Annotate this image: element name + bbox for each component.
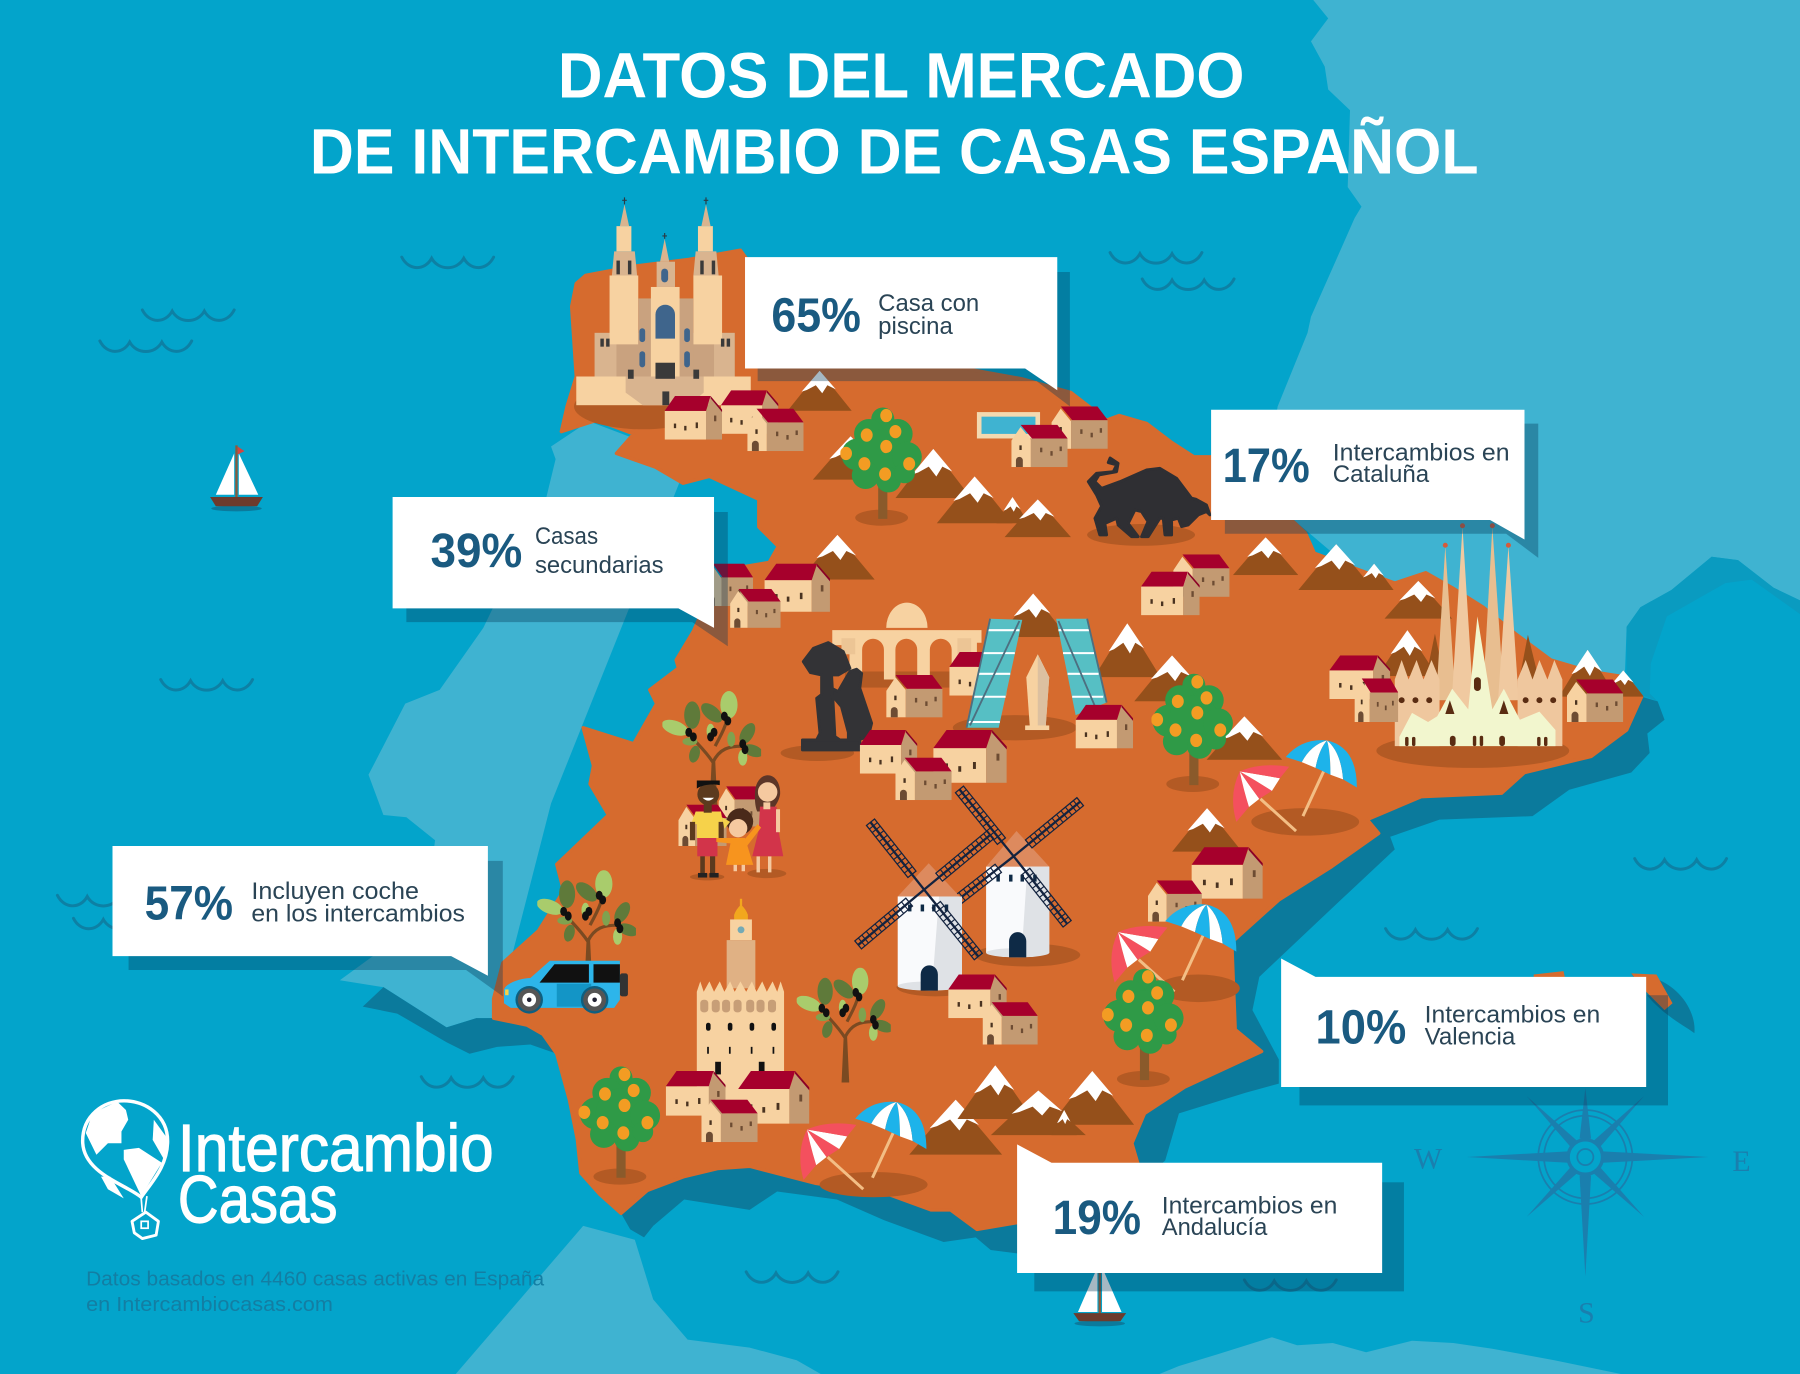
callout: 65%: Casa con bbox=[878, 290, 979, 317]
callout: 17%: 17% bbox=[1223, 439, 1310, 493]
landmark: Torre del Oro bbox=[697, 899, 784, 1113]
callout: 17%: Intercambios en bbox=[1333, 439, 1510, 466]
landmark: Oso y Madroño statue bbox=[781, 643, 872, 761]
landmark: Kio towers and obelisk bbox=[953, 619, 1107, 740]
icon: compass: E bbox=[1732, 1145, 1751, 1178]
callout: 39%: secundarias bbox=[535, 552, 664, 579]
icon: orange tree north bbox=[840, 407, 922, 526]
land: France bbox=[1263, 0, 1800, 689]
logo: Intercambio Casas: Casas bbox=[178, 1163, 337, 1237]
icon: orange tree south-west bbox=[578, 1066, 660, 1185]
callout: 19% bbox=[1017, 1144, 1404, 1291]
logo: Intercambio Casas: Intercambio bbox=[178, 1112, 494, 1186]
map: Spain bbox=[494, 250, 1642, 1229]
houses: near pool bbox=[1011, 406, 1108, 467]
callout: 39% bbox=[393, 497, 728, 646]
land: Portugal bbox=[340, 421, 689, 1027]
land: southern coast bottom bbox=[1159, 1337, 1621, 1374]
icon: sailboat west bbox=[210, 445, 263, 511]
callout: 10% bbox=[1281, 958, 1668, 1105]
footer note bbox=[86, 1268, 545, 1316]
house: behind Kio tower bbox=[949, 652, 1008, 696]
houses: Madrid bbox=[860, 675, 1134, 800]
icon: compass bbox=[1414, 1088, 1751, 1329]
footer note: en Intercambiocasas.com bbox=[86, 1293, 333, 1316]
coast shadow: Atlantic bbox=[363, 987, 557, 1054]
icon: beach umbrellas Andalucía bbox=[800, 1102, 928, 1197]
callout: 39%: Casas bbox=[535, 523, 598, 550]
logo: Intercambio Casas bbox=[83, 1101, 494, 1239]
islands: Baleares bbox=[1534, 971, 1673, 1010]
callout: 65%: 65% bbox=[771, 289, 861, 343]
icon: car bbox=[504, 961, 628, 1014]
callout: 10%: Valencia bbox=[1425, 1024, 1516, 1051]
houses: west bbox=[705, 564, 831, 628]
callout: 17%: Cataluña bbox=[1333, 461, 1430, 488]
waves bbox=[57, 253, 1727, 1290]
callout: 19%: 19% bbox=[1053, 1191, 1141, 1245]
footer note: Datos basados en 4460 casas activas en España bbox=[86, 1268, 545, 1291]
callout: 57%: Incluyen coche bbox=[251, 878, 419, 905]
title: DATOS DEL MERCADO bbox=[558, 40, 1244, 112]
callout: 57%: en los intercambios bbox=[251, 901, 465, 928]
title bbox=[310, 40, 1479, 187]
callout: 19%: Intercambios en bbox=[1162, 1192, 1337, 1219]
icon: globe balloon bbox=[83, 1101, 168, 1239]
callout: 10%: Intercambios en bbox=[1425, 1002, 1600, 1029]
icon: orange tree east bbox=[1151, 674, 1233, 792]
icon: bull bbox=[1087, 458, 1210, 546]
icon: beach umbrellas east bbox=[1233, 740, 1359, 836]
callout: 39%: 39% bbox=[430, 524, 522, 578]
callout: 57% bbox=[112, 846, 503, 996]
houses: La Mancha bbox=[948, 975, 1038, 1045]
icon: beach umbrellas Valencia bbox=[1111, 904, 1240, 1002]
icon: olive tree south bbox=[794, 968, 894, 1083]
houses: Cataluña bbox=[1329, 655, 1623, 722]
landmark: Santiago cathedral bbox=[574, 197, 751, 429]
landmark: Sagrada Familia bbox=[1376, 523, 1569, 768]
island shadow: Baleares bbox=[1631, 973, 1695, 1033]
callout: 65% bbox=[745, 257, 1070, 406]
icon: orange tree south-east bbox=[1102, 969, 1184, 1087]
icon: swimming pool bbox=[977, 412, 1040, 438]
icon: olive tree north bbox=[660, 691, 765, 808]
icon: compass: S bbox=[1578, 1296, 1595, 1329]
houses: family area bbox=[678, 786, 765, 846]
land: Africa bbox=[456, 1226, 821, 1374]
icon: compass: W bbox=[1414, 1143, 1443, 1176]
houses: Galicia bbox=[665, 390, 804, 451]
title: DE INTERCAMBIO DE CASAS ESPAÑOL bbox=[310, 115, 1479, 187]
houses: north-east bbox=[1141, 554, 1229, 615]
houses: Valencia bbox=[1148, 847, 1264, 922]
houses: Sevilla bbox=[666, 1071, 811, 1142]
icon: sailboat south bbox=[1073, 1263, 1126, 1326]
callout: 17% bbox=[1211, 410, 1538, 558]
landmark: windmills bbox=[855, 786, 1083, 996]
mountains bbox=[788, 371, 1644, 1155]
icon: olive tree west bbox=[535, 870, 640, 987]
illustration: family bbox=[690, 775, 786, 880]
callout: 65%: piscina bbox=[878, 313, 953, 340]
coast shadow: Mediterranean bbox=[621, 677, 1665, 1253]
callout: 19%: Andalucía bbox=[1162, 1214, 1268, 1241]
landmark: Puerta de Alcalá bbox=[832, 603, 982, 688]
coast band: Mediterranean north bbox=[1627, 557, 1800, 701]
callout: 10%: 10% bbox=[1316, 1000, 1406, 1054]
callout: 57%: 57% bbox=[145, 876, 233, 930]
